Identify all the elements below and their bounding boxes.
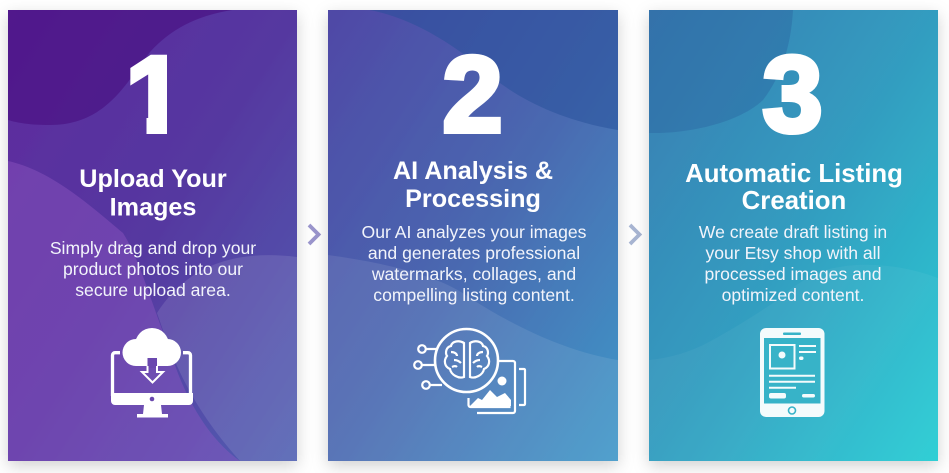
step number 2: 2 bbox=[442, 34, 503, 154]
heading: automatic listing creation: Automatic Listing bbox=[685, 160, 903, 188]
heading: upload your images: Images bbox=[110, 194, 196, 222]
description: step 3: your Etsy shop with all bbox=[705, 243, 881, 263]
arrow: step 2 to step 3 bbox=[630, 225, 640, 244]
icon: AI brain with images bbox=[414, 329, 525, 413]
panel: step 1 upload bbox=[8, 10, 297, 461]
description: step 3: We create draft listing in bbox=[699, 222, 887, 242]
heading: AI analysis and processing: Processing bbox=[405, 185, 541, 213]
step number 3: 3 bbox=[762, 34, 823, 154]
icon: cloud upload to monitor bbox=[111, 328, 193, 418]
heading: AI analysis and processing: AI Analysis & bbox=[393, 157, 553, 185]
description: step 2: and generates professional bbox=[368, 243, 580, 263]
panel: step 2 AI analysis bbox=[328, 10, 618, 461]
description: step 3: optimized content. bbox=[722, 285, 864, 305]
description: step 2: watermarks, collages, and bbox=[371, 264, 576, 284]
icon: tablet with listing bbox=[760, 328, 824, 417]
description: step 3: processed images and bbox=[704, 264, 882, 284]
panel: step 3 automatic listing bbox=[649, 10, 938, 461]
description: step 1: secure upload area. bbox=[75, 280, 231, 300]
description: step 2: Our AI analyzes your images bbox=[362, 222, 586, 242]
heading: automatic listing creation: Creation bbox=[742, 187, 846, 215]
description: step 1: product photos into our bbox=[63, 259, 243, 279]
step number 1: 1 bbox=[125, 34, 186, 154]
description: step 2: compelling listing content. bbox=[373, 285, 575, 305]
heading: upload your images: Upload Your bbox=[79, 165, 227, 193]
arrow: step 1 to step 2 bbox=[309, 225, 318, 244]
description: step 1: Simply drag and drop your bbox=[50, 238, 256, 258]
